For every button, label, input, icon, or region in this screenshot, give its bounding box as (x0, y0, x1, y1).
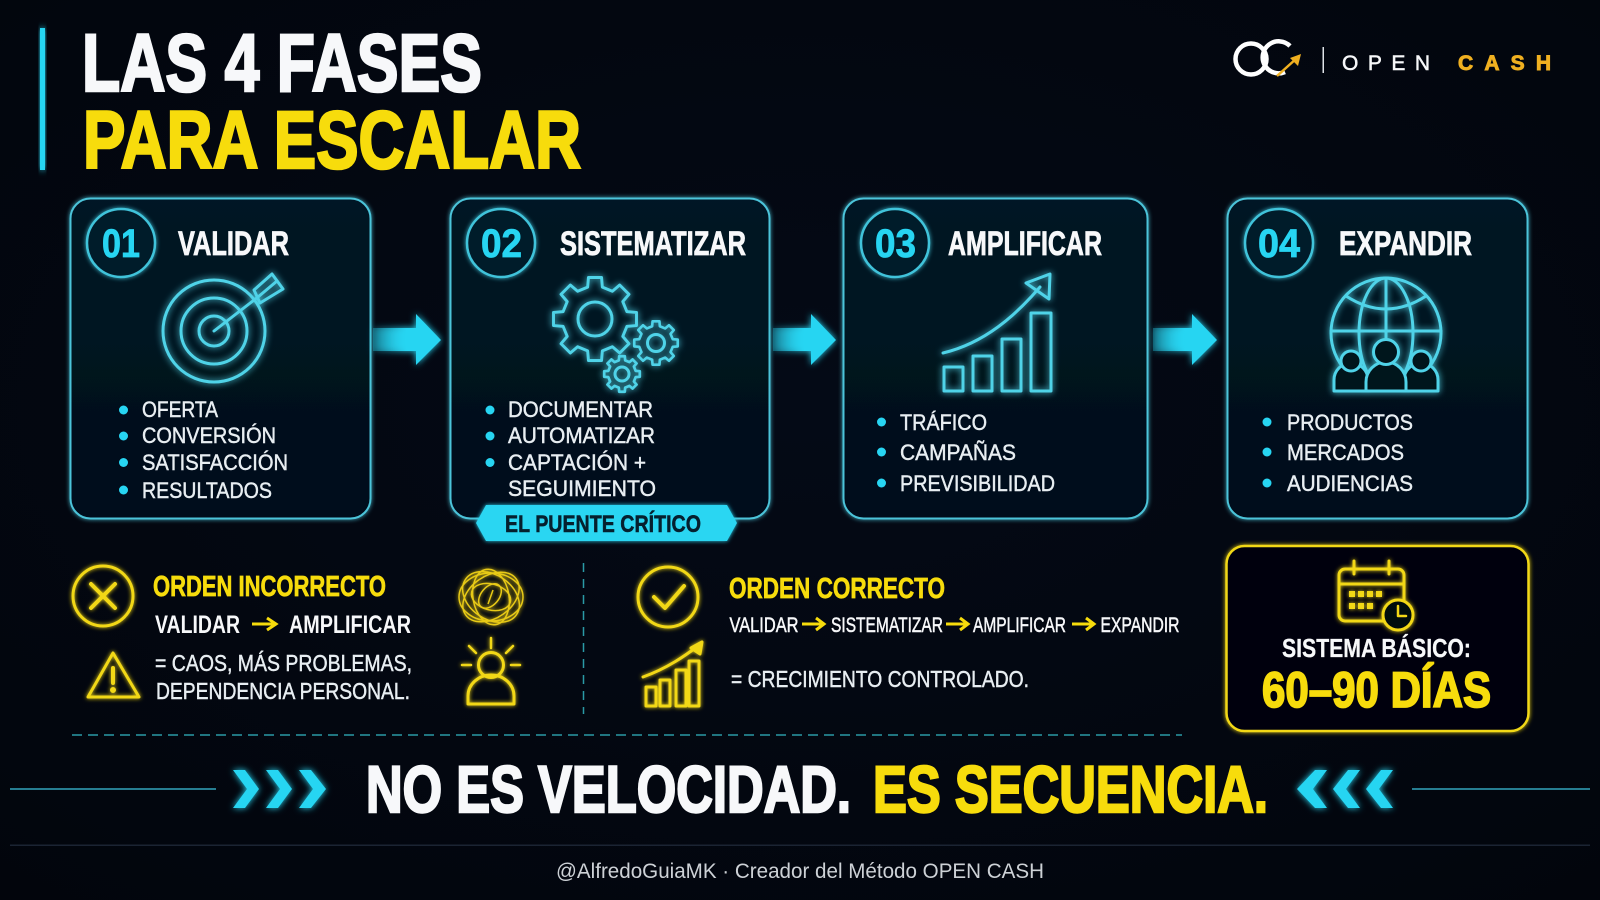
heading: expandir: EXPANDIR (1339, 225, 1472, 263)
badge: el puente critico: EL PUENTE CRÍTICO (505, 510, 701, 538)
text: 60-90 dias: 60–90 DÍAS (1262, 662, 1491, 718)
title accent bar (40, 28, 45, 170)
list: amplificar: CAMPAÑAS (900, 440, 1016, 465)
text: es secuencia: ES SECUENCIA. (873, 752, 1268, 826)
logo: open cash (1236, 41, 1551, 76)
number badge 01 (87, 209, 155, 277)
title: LAS 4 FASES (82, 18, 482, 109)
banner: no es velocidad es secuencia (10, 752, 1590, 826)
icon: calendar with clock (1339, 561, 1413, 630)
icon: x circle (73, 566, 133, 626)
arrow: fase 3 to 4 (1153, 314, 1217, 365)
divider: incorrect and correct (582, 563, 584, 714)
number badge 04 (1245, 209, 1313, 277)
list: validar: RESULTADOS (142, 478, 272, 503)
text: caos (155, 650, 412, 704)
number badge 03 (861, 209, 929, 277)
icon: stressed person (462, 638, 520, 704)
icon: gears (554, 278, 678, 392)
list: sistematizar: AUTOMATIZAR (508, 423, 655, 448)
number badge 01: 01 (102, 222, 140, 266)
icon: globe with people (1331, 278, 1441, 391)
panel: orden correcto (638, 567, 1180, 706)
text: caos: DEPENDENCIA PERSONAL. (156, 678, 410, 704)
panel: fase 03 amplificar (844, 198, 1148, 518)
text: sistema basico: SISTEMA BÁSICO: (1282, 633, 1471, 663)
sequence: four phases (730, 614, 1180, 637)
heading: sistematizar: SISTEMATIZAR (560, 225, 746, 263)
icon: target (163, 274, 283, 382)
panel: fase 02 sistematizar (450, 198, 770, 541)
sequence: validar to amplificar: AMPLIFICAR (289, 611, 411, 639)
heading: orden correcto: ORDEN CORRECTO (729, 573, 945, 605)
list: sistematizar (486, 397, 656, 501)
sequence: four phases: SISTEMATIZAR (831, 614, 943, 637)
sequence: four phases: EXPANDIR (1100, 614, 1180, 637)
panel: sistema basico (1226, 546, 1528, 731)
list: sistematizar: CAPTACIÓN + (508, 450, 646, 475)
heading: validar: VALIDAR (178, 225, 289, 263)
icon: small growth chart (643, 642, 702, 706)
icon: chevrons right (233, 770, 326, 808)
list: expandir: AUDIENCIAS (1287, 471, 1413, 496)
number badge 02: 02 (481, 222, 522, 266)
sequence: four phases: AMPLIFICAR (973, 614, 1066, 637)
list: validar: CONVERSIÓN (142, 423, 276, 448)
list: sistematizar: SEGUIMIENTO (508, 476, 656, 501)
number badge 04: 04 (1258, 222, 1301, 266)
panel: fase 04 expandir (1228, 198, 1528, 518)
icon: check circle (638, 567, 698, 627)
logo: open cash: OPEN (1342, 52, 1430, 75)
list: expandir: PRODUCTOS (1287, 410, 1413, 435)
number badge 02 (467, 209, 535, 277)
logo: open cash: CASH (1458, 52, 1551, 75)
text: no es velocidad: NO ES VELOCIDAD. (366, 752, 851, 826)
icon: growth chart (943, 274, 1051, 391)
divider: dashed separator (72, 734, 1182, 736)
arrow: fase 2 to 3 (773, 314, 836, 365)
panel: orden incorrecto (73, 561, 529, 704)
icon: chevrons left (1297, 770, 1393, 808)
list: sistematizar: DOCUMENTAR (508, 397, 653, 422)
sequence: validar to amplificar (155, 611, 411, 639)
icon: OC monogram (1236, 41, 1301, 76)
badge: el puente critico (476, 505, 737, 541)
text: crecimiento controlado: = CRECIMIENTO CONTROLADO. (731, 666, 1029, 692)
list: expandir: MERCADOS (1287, 440, 1404, 465)
arrow: fase 1 to 2 (373, 314, 441, 365)
number badge 03: 03 (875, 222, 916, 266)
heading: amplificar: AMPLIFICAR (948, 225, 1102, 263)
list: amplificar: PREVISIBILIDAD (900, 471, 1055, 496)
list: expandir (1262, 410, 1413, 496)
icon: warning triangle (88, 653, 139, 697)
list: validar: OFERTA (142, 397, 218, 422)
footer divider (10, 844, 1590, 846)
text: caos: = CAOS, MÁS PROBLEMAS, (155, 650, 412, 676)
list: validar (119, 397, 288, 503)
list: validar: SATISFACCIÓN (142, 450, 288, 475)
list: amplificar: TRÁFICO (900, 410, 987, 435)
list: amplificar (877, 410, 1055, 496)
sequence: validar to amplificar: VALIDAR (155, 611, 240, 639)
sequence: four phases: VALIDAR (730, 614, 798, 637)
heading: orden incorrecto: ORDEN INCORRECTO (153, 571, 386, 603)
title (82, 18, 581, 186)
icon: tangled scribble (453, 561, 529, 633)
title: PARA ESCALAR (83, 95, 581, 186)
footer credit: @AlfredoGuiaMK · Creador del Método OPEN CASH (556, 860, 1044, 883)
panel: fase 01 validar (70, 198, 370, 518)
